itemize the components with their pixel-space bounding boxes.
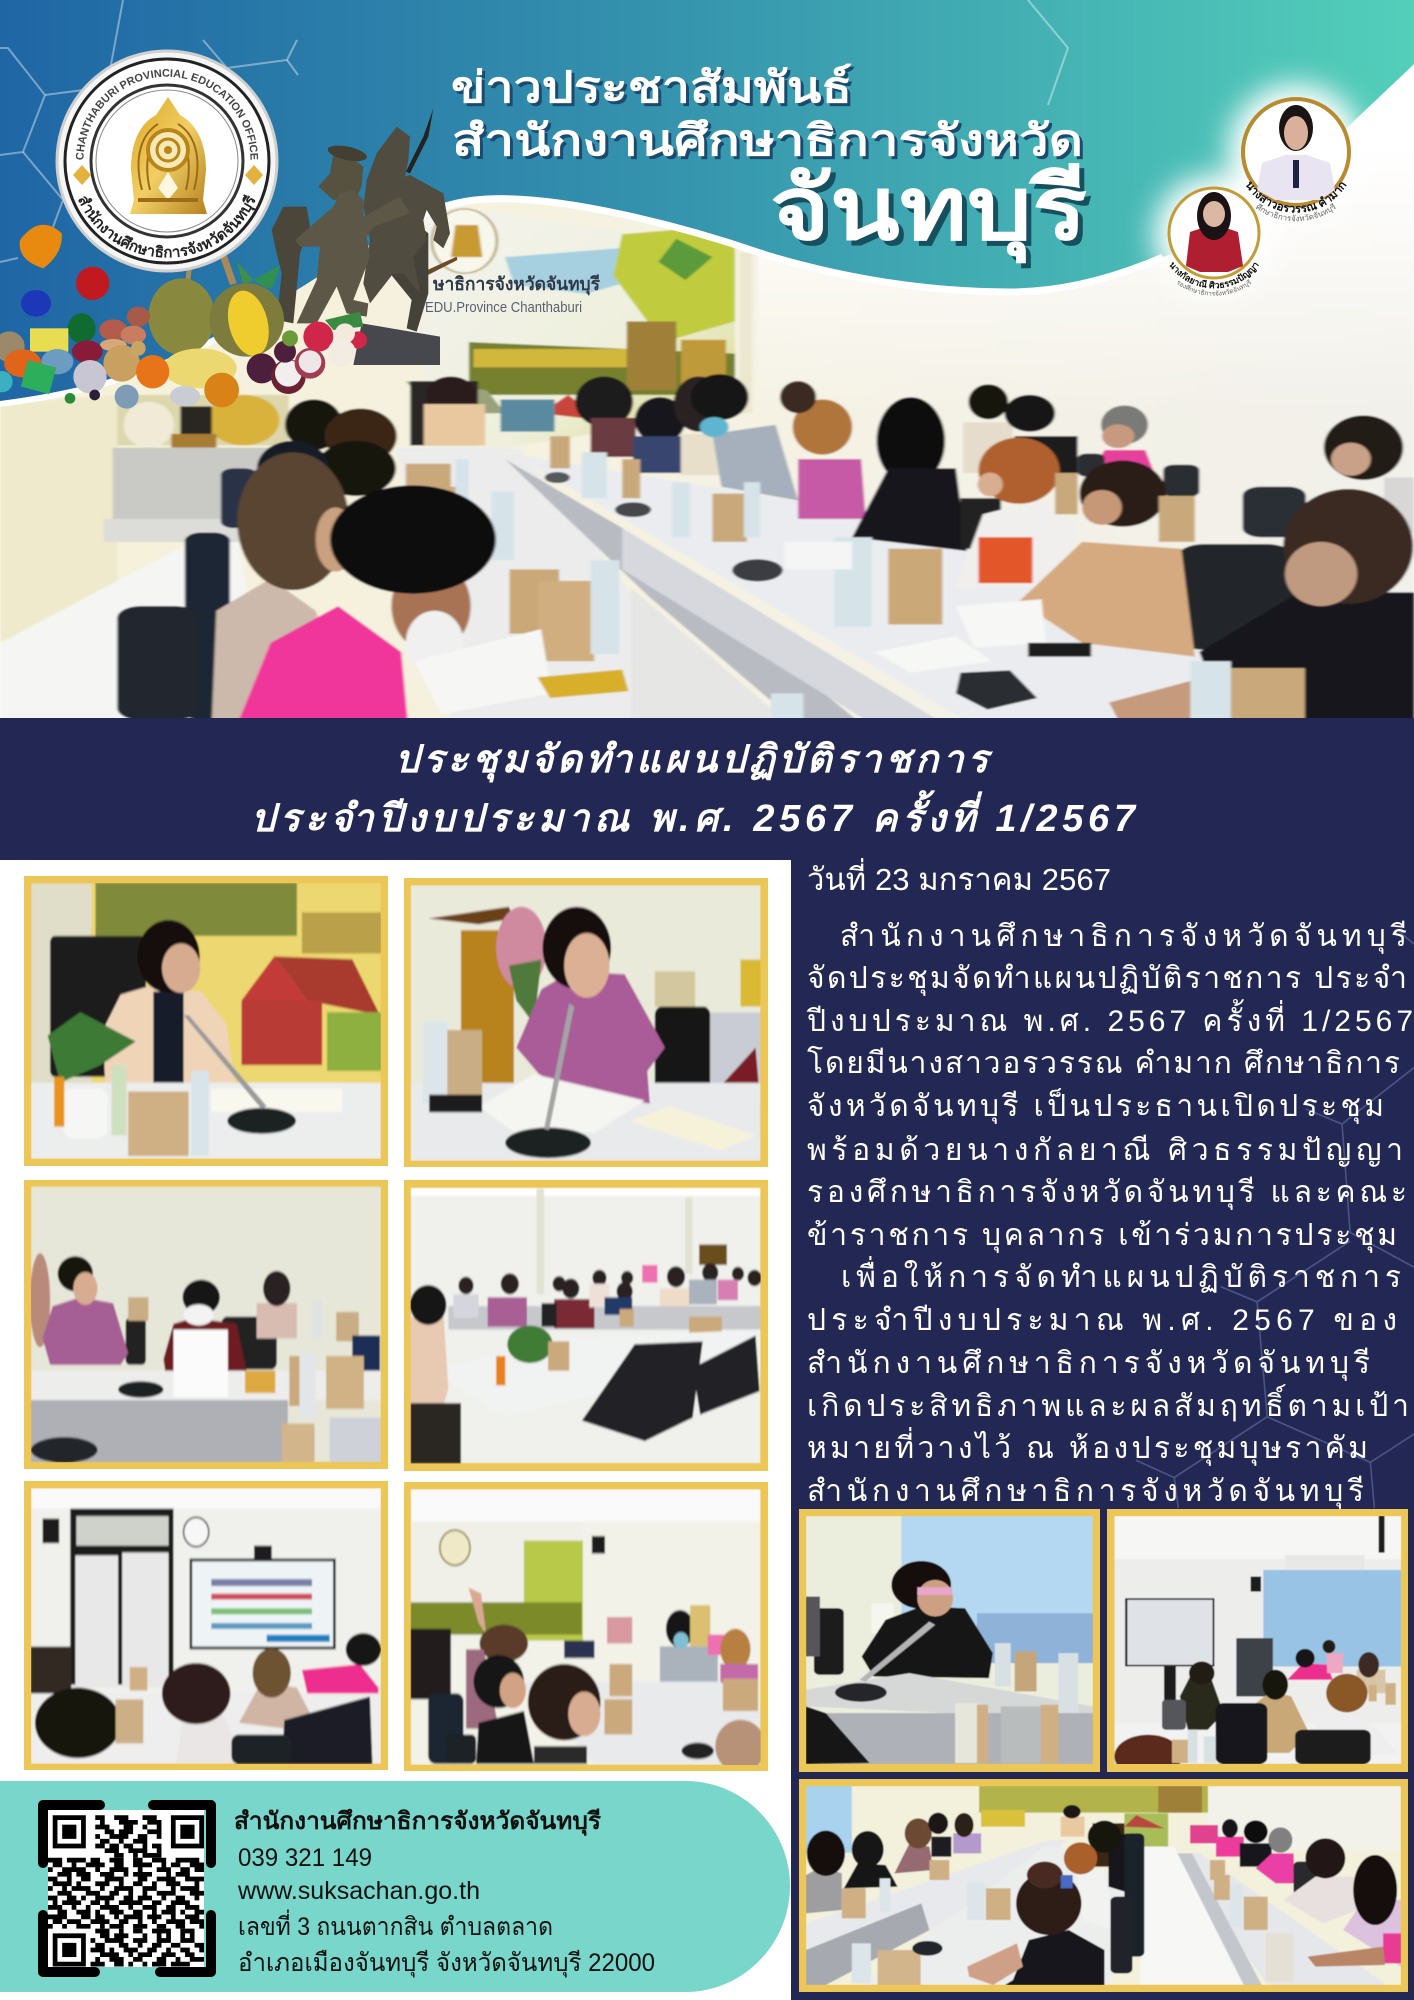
event title: ประจำปีงบประมาณ พ.ศ. 2567 ครั้งที่ 1/2567 [251, 790, 1137, 840]
logo ring text [76, 69, 258, 258]
portrait: small [1168, 186, 1260, 296]
header hexagon pattern [0, 0, 1068, 262]
portrait glow [1154, 84, 1364, 295]
contact text: 039 321 149 [238, 1844, 372, 1872]
contact text: อำเภอเมืองจันทบุรี จังหวัดจันทบุรี 22000 [238, 1949, 655, 1978]
date: วันที่ 23 มกราคม 2567 [807, 858, 1111, 897]
body text: จังหวัดจันทบุรี เป็นประธานเปิดประชุม [807, 1087, 1384, 1125]
photo 1: chair speaking [24, 876, 388, 1166]
body text: ปีงบประมาณ พ.ศ. 2567 ครั้งที่ 1/2567 [806, 999, 1413, 1038]
body text: สำนักงานศึกษาธิการจังหวัดจันทบุรี [807, 1347, 1370, 1382]
contact text [234, 1808, 655, 1978]
banner text in photo: EDU.Province Chanthaburi [425, 299, 582, 316]
body text: ข้าราชการ บุคลากร เข้าร่วมการประชุม [807, 1219, 1397, 1254]
body text: รองศึกษาธิการจังหวัดจันทบุรี และคณะ [807, 1176, 1407, 1211]
navy right panel [791, 860, 1414, 2000]
footer contact panel [0, 1781, 790, 1992]
body text: พร้อมด้วยนางกัลยาณี ศิวธรรมปัญญา [807, 1134, 1403, 1167]
logo ring text: สำนักงานศึกษาธิการจังหวัดจันทบุรี [78, 194, 256, 258]
event title: ประชุมจัดทำแผนปฏิบัติราชการ [395, 739, 994, 783]
logo badge [56, 50, 278, 272]
header title [451, 63, 1083, 165]
photo C: long table view [799, 1779, 1408, 1992]
statue monument [272, 108, 458, 365]
photo 5: projector screen [24, 1481, 388, 1770]
logo emblem [130, 97, 207, 214]
header title: province: จันทบุรี [770, 159, 1087, 264]
portrait caption: small: นางกัลยาณี ศิวธรรมปัญญา [1170, 262, 1259, 288]
photo B: room with screen [1107, 1509, 1408, 1778]
banner text in photo: ษาธิการจังหวัดจันทบุรี [433, 274, 600, 296]
photo 4: room with black chairs [404, 1180, 768, 1471]
photo A: woman with pink glasses [799, 1509, 1100, 1772]
portrait caption: small: รองศึกษาธิการจังหวัดจันทบุรี [1178, 279, 1251, 296]
body text: เกิดประสิทธิภาพและผลสัมฤทธิ์ตามเป้า [807, 1384, 1409, 1423]
body text: เพื่อให้การจัดทำแผนปฏิบัติราชการ [841, 1256, 1401, 1294]
logo ring text: CHANTHABURI PROVINCIAL EDUCATION OFFICE [76, 69, 258, 160]
contact text: www.suksachan.go.th [237, 1877, 480, 1905]
header title: สำนักงานศึกษาธิการจังหวัด [452, 117, 1083, 165]
event title [251, 739, 1137, 840]
gems and fruit cluster [0, 224, 367, 409]
body text [806, 920, 1413, 1510]
banner text in photo [425, 274, 600, 316]
body text: จัดประชุมจัดทำแผนปฏิบัติราชการ ประจำ [807, 962, 1407, 997]
body text: สำนักงานศึกษาธิการจังหวัดจันทบุรี [807, 1475, 1364, 1510]
header title: ข่าวประชาสัมพันธ์ [451, 63, 852, 112]
body text: หมายที่วางไว้ ณ ห้องประชุมบุษราคัม [807, 1427, 1368, 1467]
hero photo: meeting room [0, 202, 1414, 718]
QR code [43, 1805, 211, 1972]
header wave banner [0, 0, 1414, 404]
portrait caption: large: ศึกษาธิการจังหวัดจันทบุรี [1256, 202, 1336, 222]
body text: โดยมีนางสาวอรวรรณ คำมาก ศึกษาธิการ [807, 1045, 1400, 1080]
photo 6: raising hands [404, 1482, 768, 1773]
portrait: large [1241, 97, 1351, 222]
contact text: สำนักงานศึกษาธิการจังหวัดจันทบุรี [234, 1808, 601, 1837]
photo 3: seated women [24, 1180, 388, 1469]
body text: สำนักงานศึกษาธิการจังหวัดจันทบุรี [840, 920, 1407, 955]
portrait caption: large: นางสาวอรวรรณ คำมาก [1246, 182, 1347, 213]
photo 2: woman in purple [404, 878, 768, 1167]
title band [0, 718, 1414, 860]
panel hexagon pattern [1136, 931, 1414, 1508]
contact text: เลขที่ 3 ถนนตากสิน ตำบลตลาด [238, 1909, 553, 1941]
body text: ประจำปีงบประมาณ พ.ศ. 2567 ของ [807, 1304, 1397, 1337]
logo diamonds [73, 165, 263, 185]
